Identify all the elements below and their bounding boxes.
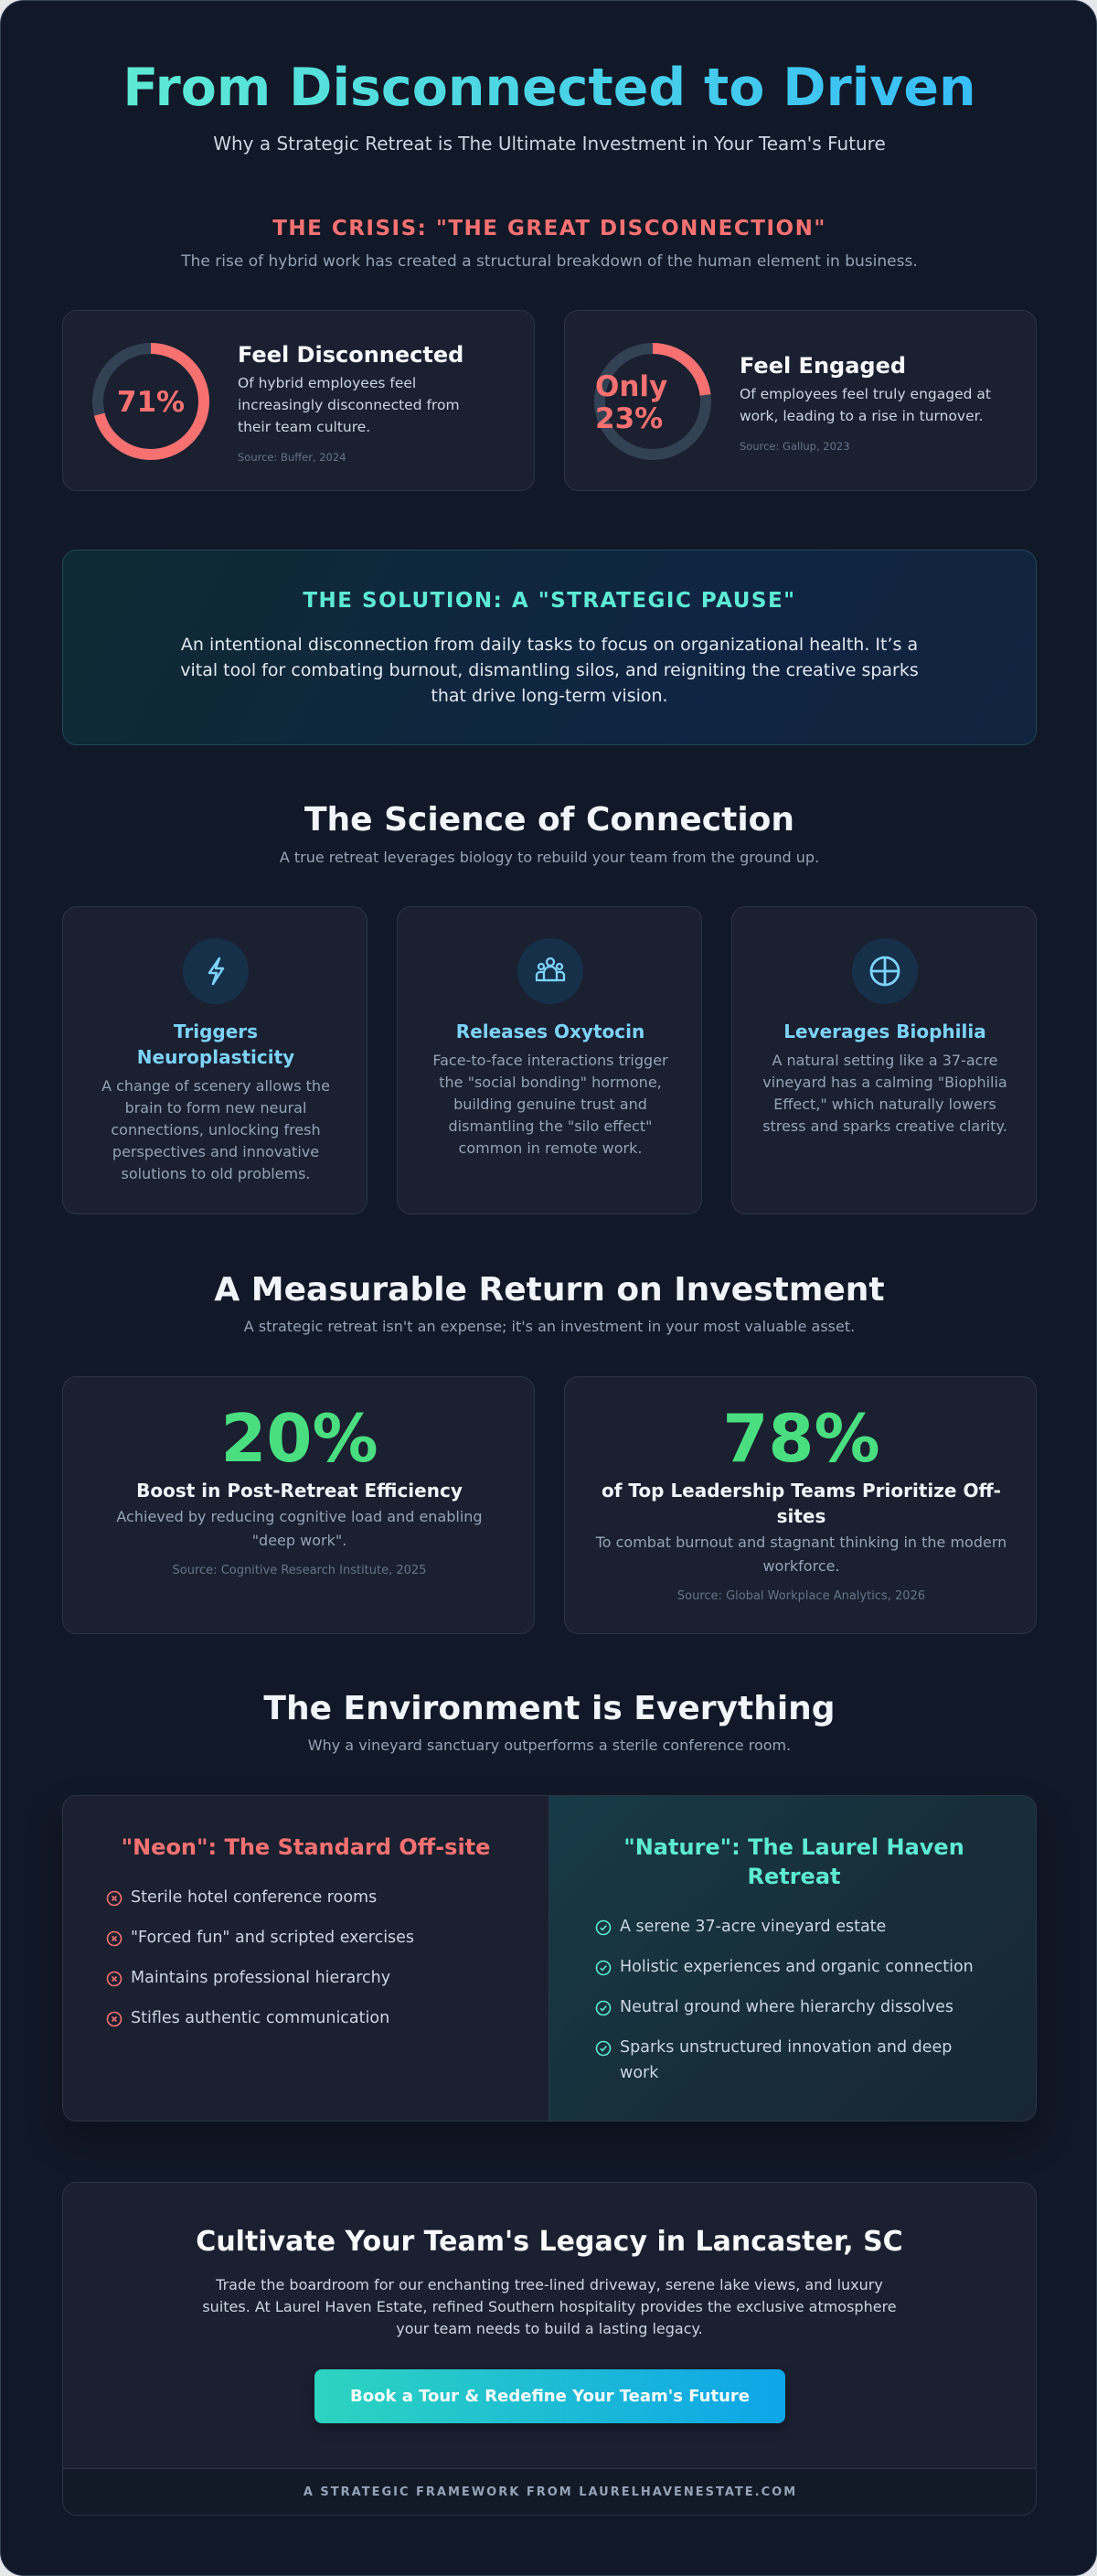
CTA button — [314, 2369, 785, 2423]
text: Of employees feel truly engaged at work, leading to a rise in turnover. — [740, 386, 991, 424]
solution heading: THE SOLUTION: A "STRATEGIC PAUSE" — [303, 589, 796, 613]
nature heading — [623, 1834, 964, 1889]
icon: people — [517, 938, 583, 1004]
ROI card: 20%: "deep work". — [252, 1532, 346, 1549]
ROI card: 78%: To combat burnout and stagnant thinking in the modern — [596, 1534, 1006, 1551]
science heading: The Science of Connection — [304, 801, 794, 839]
ROI card: 20%: Boost in Post-Retreat Efficiency — [136, 1480, 463, 1502]
ROI subtitle: A strategic retreat isn't an expense; it's an investment in your most valuable asset. — [244, 1318, 855, 1335]
ROI card: 20%: Achieved by reducing cognitive load and enabling — [116, 1508, 483, 1525]
ROI card: 78%: 78% — [722, 1400, 880, 1477]
nature list — [596, 1918, 974, 2082]
card: oxytocin — [397, 906, 702, 1214]
neon heading: "Neon": The Standard Off-site — [122, 1834, 490, 1860]
nature heading: Retreat — [747, 1864, 841, 1889]
neon list — [106, 1888, 414, 2027]
nature list: Sparks unstructured innovation and deep work — [620, 2038, 952, 2082]
text: Source: Buffer, 2024 — [238, 451, 346, 464]
ROI card: 78%: of Top Leadership Teams Prioritize Off- — [602, 1480, 1001, 1502]
nature list: Holistic experiences and organic connection — [620, 1958, 974, 1976]
card: biophilia — [731, 906, 1037, 1214]
title: From Disconnected to Driven — [122, 58, 976, 118]
card: oxytocin: Face-to-face interactions trigger the "social bonding" hormone, building genuine trust and dismantling the "silo effect" common in remote work. — [432, 1052, 668, 1157]
subtitle: Why a Strategic Retreat is The Ultimate Investment in Your Team's Future — [213, 133, 886, 155]
card: neuroplasticity — [62, 906, 367, 1214]
text: Source: Gallup, 2023 — [740, 440, 850, 453]
stat card: engaged — [564, 310, 1037, 491]
neon list: Sterile hotel conference rooms — [131, 1888, 377, 1907]
science subtitle: A true retreat leverages biology to rebuild your team from the ground up. — [280, 849, 819, 866]
CTA heading: Cultivate Your Team's Legacy in Lancaster, SC — [196, 2226, 903, 2258]
neon list: Maintains professional hierarchy — [131, 1969, 390, 1987]
footer: A STRATEGIC FRAMEWORK FROM LAURELHAVENESTATE.COM — [304, 2485, 797, 2499]
panel: solution — [62, 550, 1037, 745]
nature list: A serene 37-acre vineyard estate — [620, 1918, 886, 1936]
environment heading: The Environment is Everything — [263, 1690, 836, 1727]
neon list: Stifles authentic communication — [131, 2009, 389, 2027]
ROI card: 78%: sites — [777, 1505, 825, 1527]
nature heading: "Nature": The Laurel Haven — [623, 1834, 964, 1860]
crisis heading: THE CRISIS: "THE GREAT DISCONNECTION" — [272, 217, 826, 240]
text — [740, 353, 991, 453]
ROI card: 78%: Source: Global Workplace Analytics, 2026 — [677, 1589, 925, 1603]
text — [238, 342, 463, 464]
ROI heading: A Measurable Return on Investment — [214, 1271, 885, 1309]
donut 71% — [92, 343, 209, 460]
card: neuroplasticity: Neuroplasticity — [137, 1046, 294, 1068]
ROI card: 20%: Source: Cognitive Research Institute, 2025 — [173, 1564, 426, 1577]
nature list: Neutral ground where hierarchy dissolves — [620, 1998, 953, 2016]
panel: nature — [548, 1796, 1038, 2122]
text: Feel Disconnected — [238, 342, 463, 368]
card: neuroplasticity: A change of scenery allows the brain to form new neural connections, unlocking fresh perspectives and innovative solutions to old problems. — [101, 1077, 330, 1182]
card: neuroplasticity: Triggers — [174, 1021, 258, 1042]
crisis subtitle: The rise of hybrid work has created a structural breakdown of the human element in business. — [181, 252, 918, 271]
panel: neon — [106, 1834, 490, 2027]
CTA text: Trade the boardroom for our enchanting tree-lined driveway, serene lake views, and luxury suites. At Laurel Haven Estate, refined Southern hospitality provides the exclusive atmosphere your team needs to build a lasting legacy. — [202, 2276, 897, 2337]
donut 23% — [594, 343, 711, 460]
card: oxytocin: Releases Oxytocin — [456, 1021, 644, 1042]
card: biophilia: Leverages Biophilia — [783, 1021, 986, 1042]
ROI card: 78% — [564, 1376, 1037, 1634]
ROI card: 20%: 20% — [220, 1400, 378, 1477]
CTA button: Book a Tour & Redefine Your Team's Future — [350, 2387, 750, 2406]
donut 23%: Only — [595, 370, 667, 403]
panel: comparison — [62, 1795, 1037, 2122]
icon: globe — [852, 938, 918, 1004]
card: biophilia: A natural setting like a 37-acre vineyard has a calming "Biophilia Effect," which naturally lowers stress and sparks creative clarity. — [762, 1052, 1007, 1135]
text: Of hybrid employees feel increasingly disconnected from their team culture. — [238, 375, 460, 435]
ROI card: 78%: workforce. — [762, 1557, 840, 1575]
neon list: "Forced fun" and scripted exercises — [131, 1929, 414, 1947]
donut 71%: 71% — [117, 386, 185, 419]
stat card: disconnected — [62, 310, 535, 491]
solution text: An intentional disconnection from daily tasks to focus on organizational health. It’s a vital tool for combating burnout, dismantling silos, and reigniting the creative sparks that drive long-term vision. — [180, 635, 919, 706]
ROI card: 20% — [62, 1376, 535, 1634]
environment subtitle: Why a vineyard sanctuary outperforms a sterile conference room. — [308, 1737, 791, 1754]
donut 23%: 23% — [595, 402, 663, 435]
panel: call to action — [62, 2182, 1037, 2516]
text: Feel Engaged — [740, 353, 906, 379]
footer — [63, 2468, 1038, 2517]
icon: bolt — [183, 938, 249, 1004]
